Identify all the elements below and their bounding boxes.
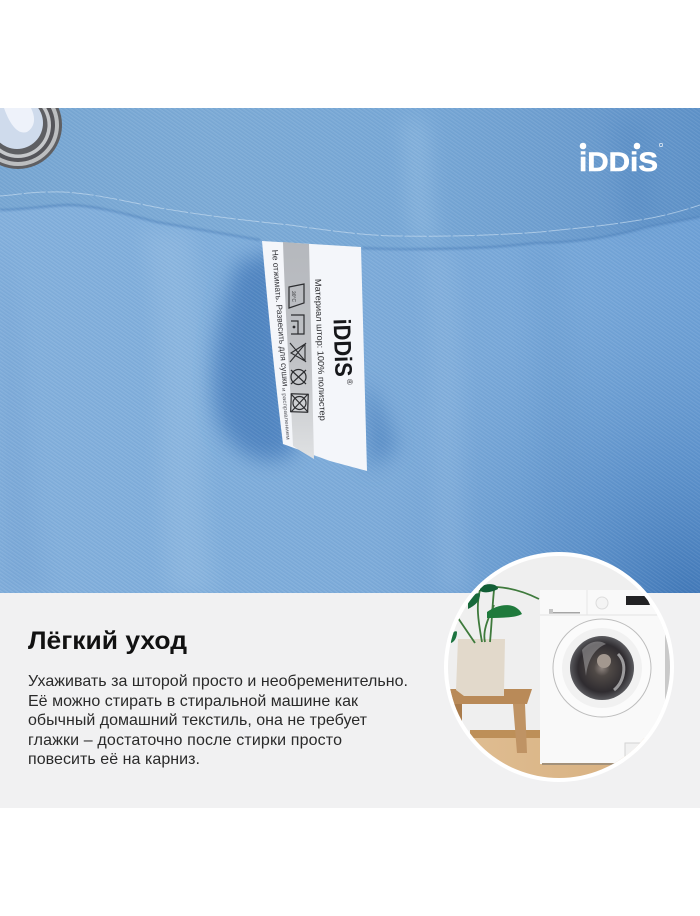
curtain lower fabric xyxy=(0,205,700,593)
text panel background xyxy=(0,593,700,808)
logo dot 1 xyxy=(580,143,586,149)
body text: Её можно стирать в стиральной машине как xyxy=(28,693,359,710)
sewn care label xyxy=(262,241,367,471)
infographic canvas xyxy=(0,108,700,808)
door xyxy=(553,619,651,717)
display xyxy=(626,596,650,605)
body text: повесить её на карниз. xyxy=(28,751,200,768)
label grey strip xyxy=(283,242,314,459)
brand logo xyxy=(580,142,663,172)
body text xyxy=(28,673,408,768)
curtain top hem band xyxy=(0,108,700,249)
fabric weave texture xyxy=(0,108,700,593)
label material text: Материал штор: 100% полиэстер xyxy=(313,279,328,421)
label logo: iDDiS xyxy=(328,318,357,377)
icon: wash at 30: 30°C xyxy=(290,291,296,303)
icon: metal grommet xyxy=(0,108,62,169)
label body xyxy=(262,241,367,471)
hem stitching xyxy=(0,192,700,236)
photo: blue curtain with label xyxy=(0,81,700,593)
right wall shadow xyxy=(665,634,670,700)
icon: wash at 30 xyxy=(289,284,304,308)
label registered mark: ® xyxy=(345,379,354,385)
heading: Лёгкий уход xyxy=(28,627,187,655)
registered mark xyxy=(659,143,663,147)
canvas bag xyxy=(456,639,505,696)
icon: no tumble dry xyxy=(291,370,306,384)
hem seam shadow xyxy=(0,205,700,249)
white circle ring xyxy=(444,552,674,782)
label small instructions text: и расправлением xyxy=(280,388,291,440)
service hatch xyxy=(624,742,640,756)
body text: Ухаживать за шторой просто и необременительно. xyxy=(28,673,408,690)
plant xyxy=(450,584,539,643)
control knob xyxy=(596,597,608,609)
label instructions text: Не отжимать. Развесить для сушки xyxy=(270,249,291,387)
body text: обычный домашний текстиль, она не требует xyxy=(28,712,368,729)
wall xyxy=(448,556,638,733)
body text: глажки – достаточно после стирки просто xyxy=(28,732,342,749)
wooden floor xyxy=(474,738,644,778)
wooden stool xyxy=(450,689,532,753)
icon: no dry clean xyxy=(291,394,308,412)
detergent drawer handle xyxy=(549,612,580,614)
icon: iron xyxy=(291,315,304,334)
brand logo: iDDiS xyxy=(579,147,658,177)
washing machine body xyxy=(540,590,665,765)
logo dot 2 xyxy=(634,143,640,149)
curtain shadow behind label xyxy=(214,250,398,470)
icon: no bleach xyxy=(290,343,306,362)
skirting board xyxy=(470,730,545,738)
round photo: washing machine xyxy=(440,550,680,788)
